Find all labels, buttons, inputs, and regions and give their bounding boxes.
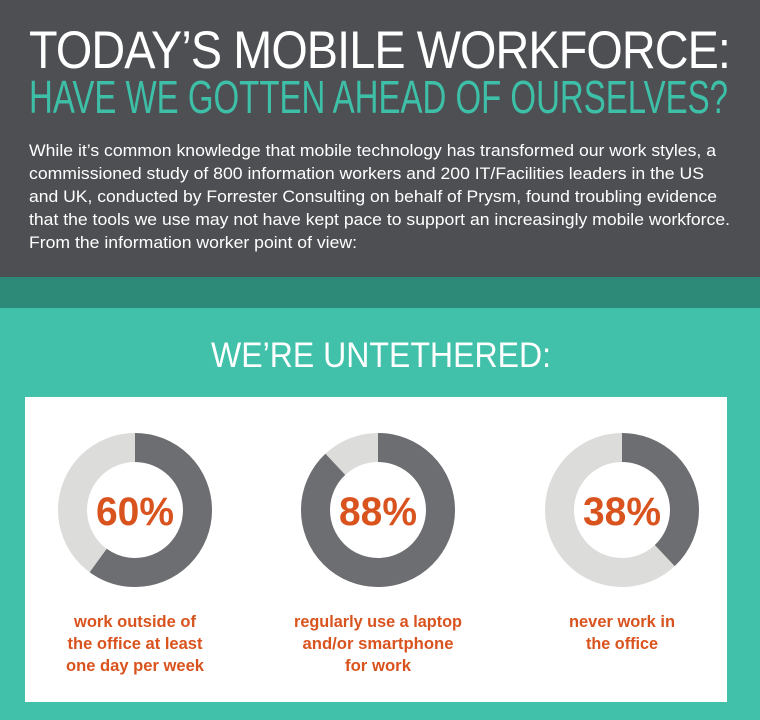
intro paragraph: commissioned study of 800 information workers and 200 IT/Facilities leaders in the US [29, 164, 704, 183]
label: 60%: work outside of [73, 612, 196, 631]
section background [0, 308, 760, 720]
donut: 38% [560, 448, 684, 572]
header panel [0, 0, 760, 277]
donut: 60%: 60% [96, 490, 174, 534]
section heading: WE’RE UNTETHERED: [211, 336, 551, 375]
label: 60%: one day per week [66, 656, 205, 675]
label: 88%: for work [345, 656, 412, 675]
label: 88%: and/or smartphone [302, 634, 454, 653]
label: 60%: the office at least [68, 634, 203, 653]
donut: 88%: 88% [339, 490, 417, 534]
label: 88%: regularly use a laptop [294, 612, 462, 631]
label: 38%: never work in [569, 612, 675, 631]
label: 38%: the office [586, 634, 658, 653]
intro paragraph: and UK, conducted by Forrester Consulting on behalf of Prysm, found troubling evidence [29, 187, 717, 206]
panel: stats [25, 397, 727, 702]
intro paragraph: that the tools we use may not have kept pace to support an increasingly mobile workforce. [29, 210, 730, 229]
label: 38% [569, 612, 675, 653]
intro paragraph: While it’s common knowledge that mobile technology has transformed our work styles, a [29, 141, 717, 160]
intro paragraph: From the information worker point of view: [29, 233, 357, 252]
label: 88% [294, 612, 462, 675]
label: 60% [66, 612, 205, 675]
donut: 38%: 38% [583, 490, 661, 534]
intro paragraph [29, 141, 730, 252]
donut: 60% [72, 448, 198, 572]
donut: 88% [316, 448, 440, 572]
band [0, 277, 760, 308]
